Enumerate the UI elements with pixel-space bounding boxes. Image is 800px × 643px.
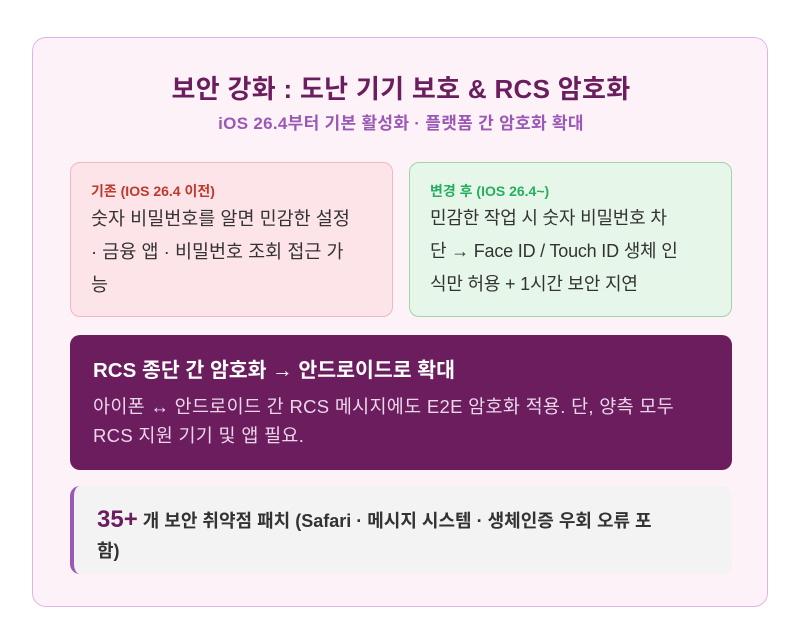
heading: after: 변경 후 (IOS 26.4~) — [430, 183, 549, 199]
text: after — [430, 208, 678, 294]
subtitle: iOS 26.4부터 기본 활성화 · 플랫폼 간 암호화 확대 — [218, 114, 584, 133]
text: before: 숫자 비밀번호를 알면 민감한 설정 — [91, 208, 350, 229]
callout: patches: 35+ 개 보안 취약점 패치 (Safari · 메시지 시스템 · 생체인증 우회 오류 포 — [97, 506, 652, 533]
text: RCS: RCS 지원 기기 및 앱 필요. — [93, 425, 304, 446]
text: RCS: 아이폰 ↔ 안드로이드 간 RCS 메시지에도 E2E 암호화 적용. 단, 양측 모두 — [93, 396, 674, 417]
panel: after — [409, 162, 732, 317]
panel: RCS — [70, 335, 732, 470]
text: before: 능 — [91, 274, 108, 295]
text: after: 단 → Face ID / Touch ID 생체 인 — [430, 241, 678, 261]
heading: RCS: RCS 종단 간 암호화 → 안드로이드로 확대 — [93, 359, 455, 382]
heading: before: 기존 (IOS 26.4 이전) — [91, 183, 215, 199]
text: before: · 금융 앱 · 비밀번호 조회 접근 가 — [91, 241, 344, 262]
panel: before — [70, 162, 393, 317]
text: after: 식만 허용 + 1시간 보안 지연 — [430, 274, 638, 294]
callout: patches — [70, 486, 732, 574]
text: RCS — [93, 396, 674, 446]
title: 보안 강화 : 도난 기기 보호 & RCS 암호화 — [172, 74, 630, 104]
callout: patches: 함) — [97, 541, 120, 561]
text: before — [91, 208, 350, 295]
text: after: 민감한 작업 시 숫자 비밀번호 차 — [430, 208, 667, 228]
